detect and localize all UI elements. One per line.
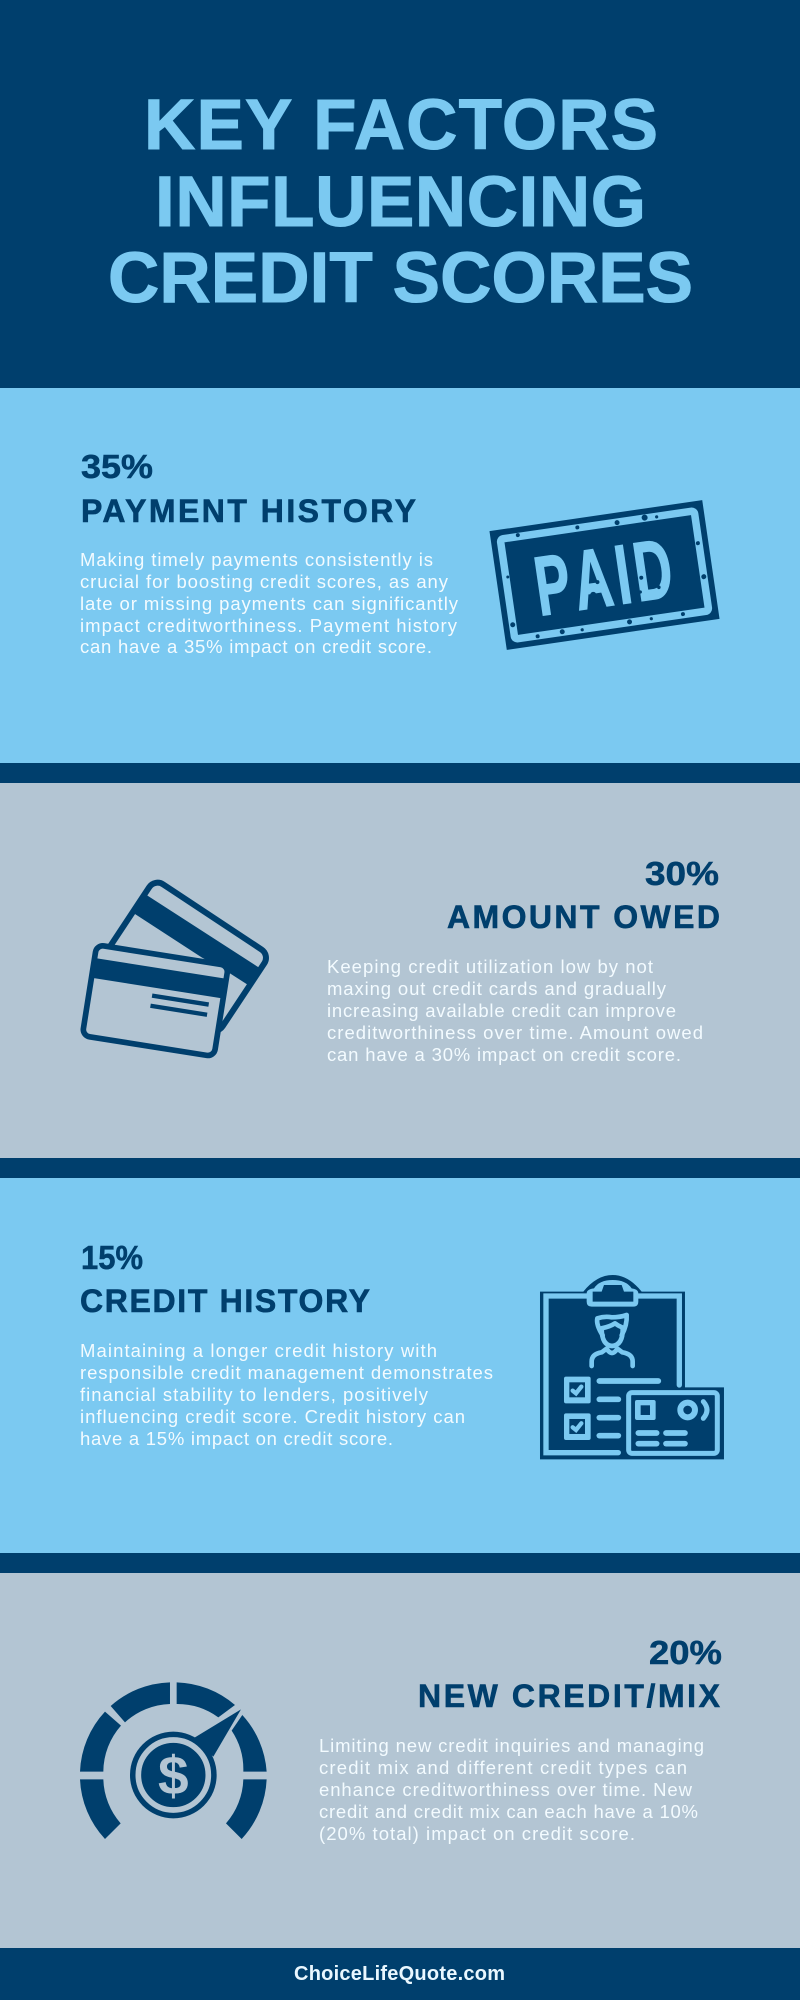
icon: clipboard and id card — [540, 1275, 724, 1459]
body text: new credit and mix: credit and credit mix can each have a 10% — [319, 1801, 698, 1822]
heading: new credit/mix: NEW CREDIT/MIX — [418, 1678, 721, 1714]
body text: payment history — [80, 549, 459, 657]
body text: payment history: Making timely payments consistently is — [80, 549, 433, 570]
heading: credit history: CREDIT HISTORY — [80, 1283, 370, 1319]
body text: new credit and mix: credit mix and different credit types can — [319, 1757, 687, 1778]
panel: new credit and mix — [0, 1573, 800, 1948]
body text: credit history: Maintaining a longer credit history with — [80, 1340, 437, 1361]
panel: amount owed — [0, 783, 800, 1158]
body text: payment history: can have a 35% impact on credit score. — [80, 636, 432, 657]
body text: new credit and mix: Limiting new credit inquiries and managing — [319, 1735, 704, 1756]
body text: credit history: influencing credit score. Credit history can — [80, 1406, 465, 1427]
body text: amount owed: Keeping credit utilization low by not — [327, 956, 653, 977]
body text: payment history: impact creditworthiness. Payment history — [80, 615, 458, 636]
body text: amount owed: maxing out credit cards and gradually — [327, 978, 667, 999]
title: INFLUENCING — [155, 163, 646, 242]
panel: payment history — [0, 388, 800, 763]
body text: credit history: responsible credit management demonstrates — [80, 1362, 493, 1383]
percentage: 15%: 15% — [81, 1239, 143, 1276]
icon: speedometer with dollar sign — [80, 1682, 267, 1839]
body text: new credit and mix: (20% total) impact on credit score. — [319, 1823, 635, 1844]
body text: amount owed: creditworthiness over time. Amount owed — [327, 1022, 703, 1043]
header panel — [0, 0, 800, 388]
body text: payment history: crucial for boosting credit scores, as any — [80, 571, 449, 592]
icon: paid stamp: PAID — [529, 521, 678, 634]
divider band — [0, 1158, 800, 1178]
heading: payment history: PAYMENT HISTORY — [81, 493, 416, 529]
divider band — [0, 1553, 800, 1573]
heading: amount owed: AMOUNT OWED — [447, 899, 720, 935]
body text: credit history: have a 15% impact on credit score. — [80, 1428, 393, 1449]
divider band — [0, 763, 800, 783]
icon: speedometer with dollar sign: $ — [158, 1745, 189, 1807]
icon: credit cards — [80, 879, 270, 1057]
body text: credit history — [80, 1340, 493, 1449]
panel: credit history — [0, 1178, 800, 1553]
body text: credit history: financial stability to lenders, positively — [80, 1384, 429, 1405]
icon: paid stamp — [489, 500, 720, 650]
body text: amount owed: can have a 30% impact on credit score. — [327, 1044, 681, 1065]
percentage: 20%: 20% — [649, 1634, 722, 1671]
title: CREDIT SCORES — [108, 239, 693, 318]
footer text: ChoiceLifeQuote.com — [294, 1963, 505, 1985]
footer band — [0, 1948, 800, 2000]
percentage: 30%: 30% — [645, 855, 719, 892]
percentage: 35%: 35% — [81, 448, 153, 485]
body text: new credit and mix: enhance creditworthiness over time. New — [319, 1779, 693, 1800]
title — [108, 86, 693, 318]
body text: amount owed: increasing available credit can improve — [327, 1000, 676, 1021]
body text: amount owed — [327, 956, 703, 1065]
body text: new credit and mix — [319, 1735, 704, 1844]
title: KEY FACTORS — [144, 86, 658, 165]
body text: payment history: late or missing payments can significantly — [80, 593, 459, 614]
